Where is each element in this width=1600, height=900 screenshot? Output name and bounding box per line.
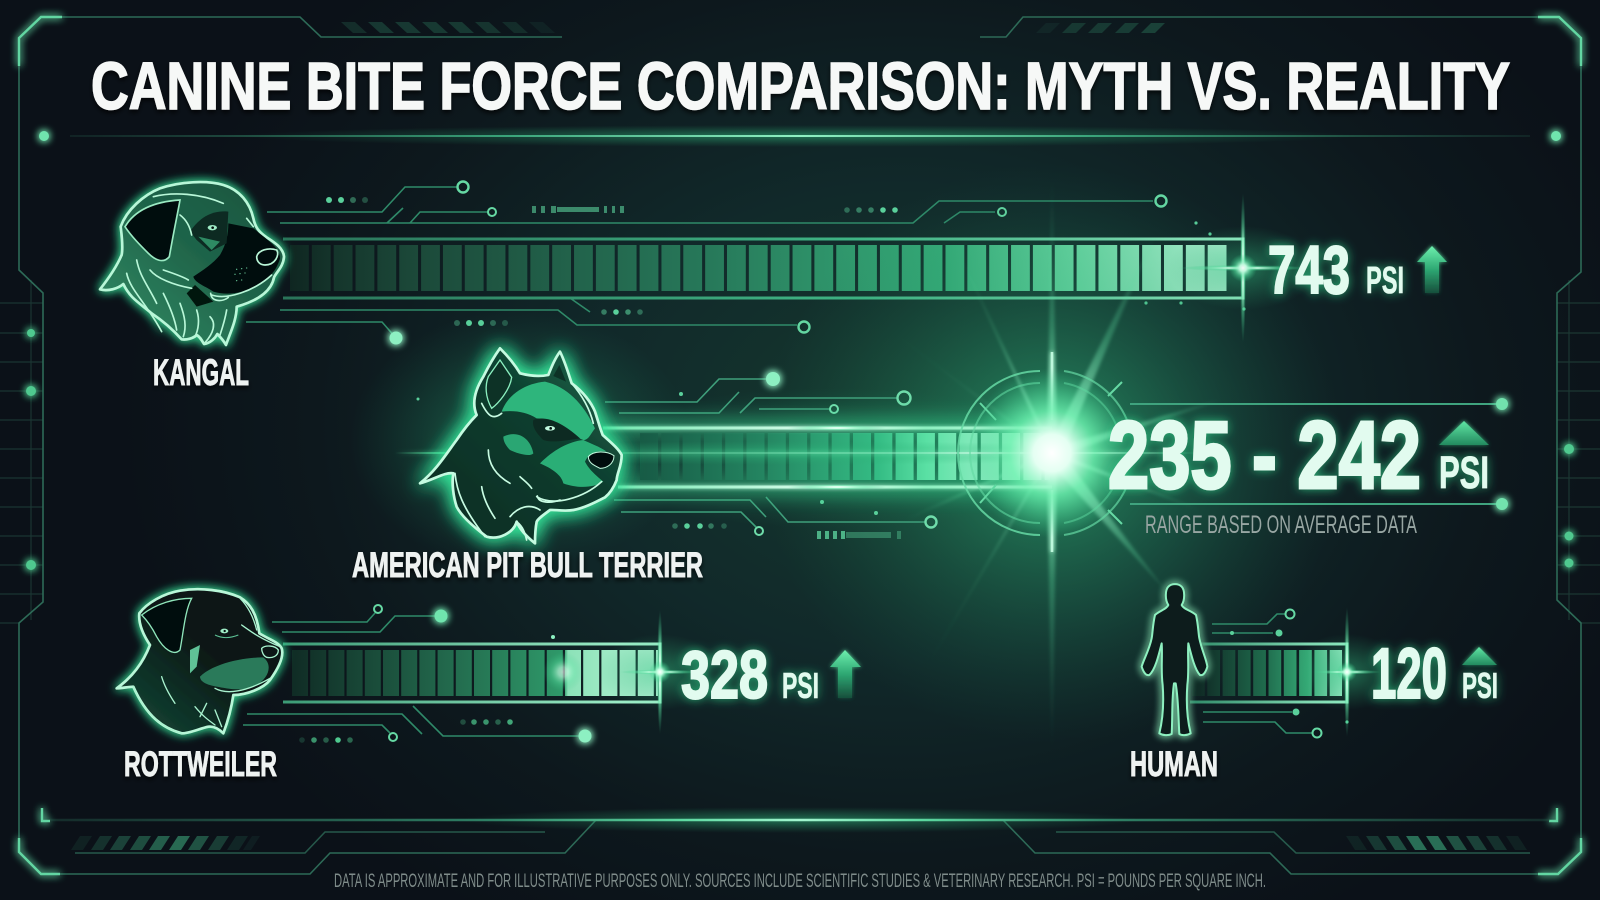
circuit traces: rottweiler (243, 605, 580, 741)
value: 235-242 psi: PSI (1439, 447, 1489, 498)
value: 328 psi: 328 (681, 637, 768, 713)
circuit traces: pit bull (605, 379, 936, 535)
value: 235-242 psi: 235 - 242 (1108, 402, 1421, 509)
circuit traces: human (1203, 610, 1322, 738)
label: kangal: KANGAL (153, 352, 249, 393)
value: 328 psi: PSI (782, 665, 819, 706)
value: 120 psi: 120 (1371, 635, 1447, 714)
value: 120 psi: PSI (1462, 665, 1498, 706)
icon: human silhouette (1142, 584, 1207, 735)
panel: human (1130, 584, 1498, 784)
flare: horizontal beam (395, 441, 1200, 465)
label: rottweiler: ROTTWEILER (124, 745, 277, 784)
arrow: pit bull triangle (1439, 421, 1489, 445)
dog head: pit bull (420, 348, 622, 543)
frame: top divider line (70, 125, 1530, 147)
range lines (1130, 398, 1508, 510)
bar: kangal (283, 193, 1318, 343)
label: human: HUMAN (1130, 745, 1218, 784)
node dots: rottweiler (299, 610, 592, 743)
node dots: kangal (326, 197, 1246, 344)
note: range: RANGE BASED ON AVERAGE DATA (1145, 511, 1417, 539)
arrow: kangal (1417, 246, 1447, 293)
panel: american pit bull terrier (350, 163, 1508, 760)
flare: core (967, 368, 1137, 538)
bar: rottweiler (283, 610, 722, 734)
label: pit bull: AMERICAN PIT BULL TERRIER (352, 546, 703, 585)
panel: kangal (100, 182, 1447, 393)
flare: star burst (350, 163, 1342, 760)
arrow: human triangle (1462, 647, 1497, 665)
frame: glowing side dots (26, 131, 1574, 570)
frame: side grids (0, 280, 1600, 623)
value: 743 psi: 743 (1268, 232, 1350, 308)
dog head: kangal (100, 182, 284, 345)
circuit traces: kangal (246, 182, 1166, 338)
frame: bottom divider line (50, 807, 1550, 833)
dog head: rottweiler (117, 589, 282, 733)
target reticle (958, 352, 1127, 552)
node dots: pit bull (416, 372, 901, 539)
value: 743 psi: PSI (1366, 260, 1404, 302)
panel: rottweiler (117, 589, 861, 784)
arrow: rottweiler (830, 650, 861, 698)
bar: human (1190, 607, 1405, 737)
node dots: human (1230, 630, 1349, 724)
bar: pit bull (600, 420, 1052, 494)
